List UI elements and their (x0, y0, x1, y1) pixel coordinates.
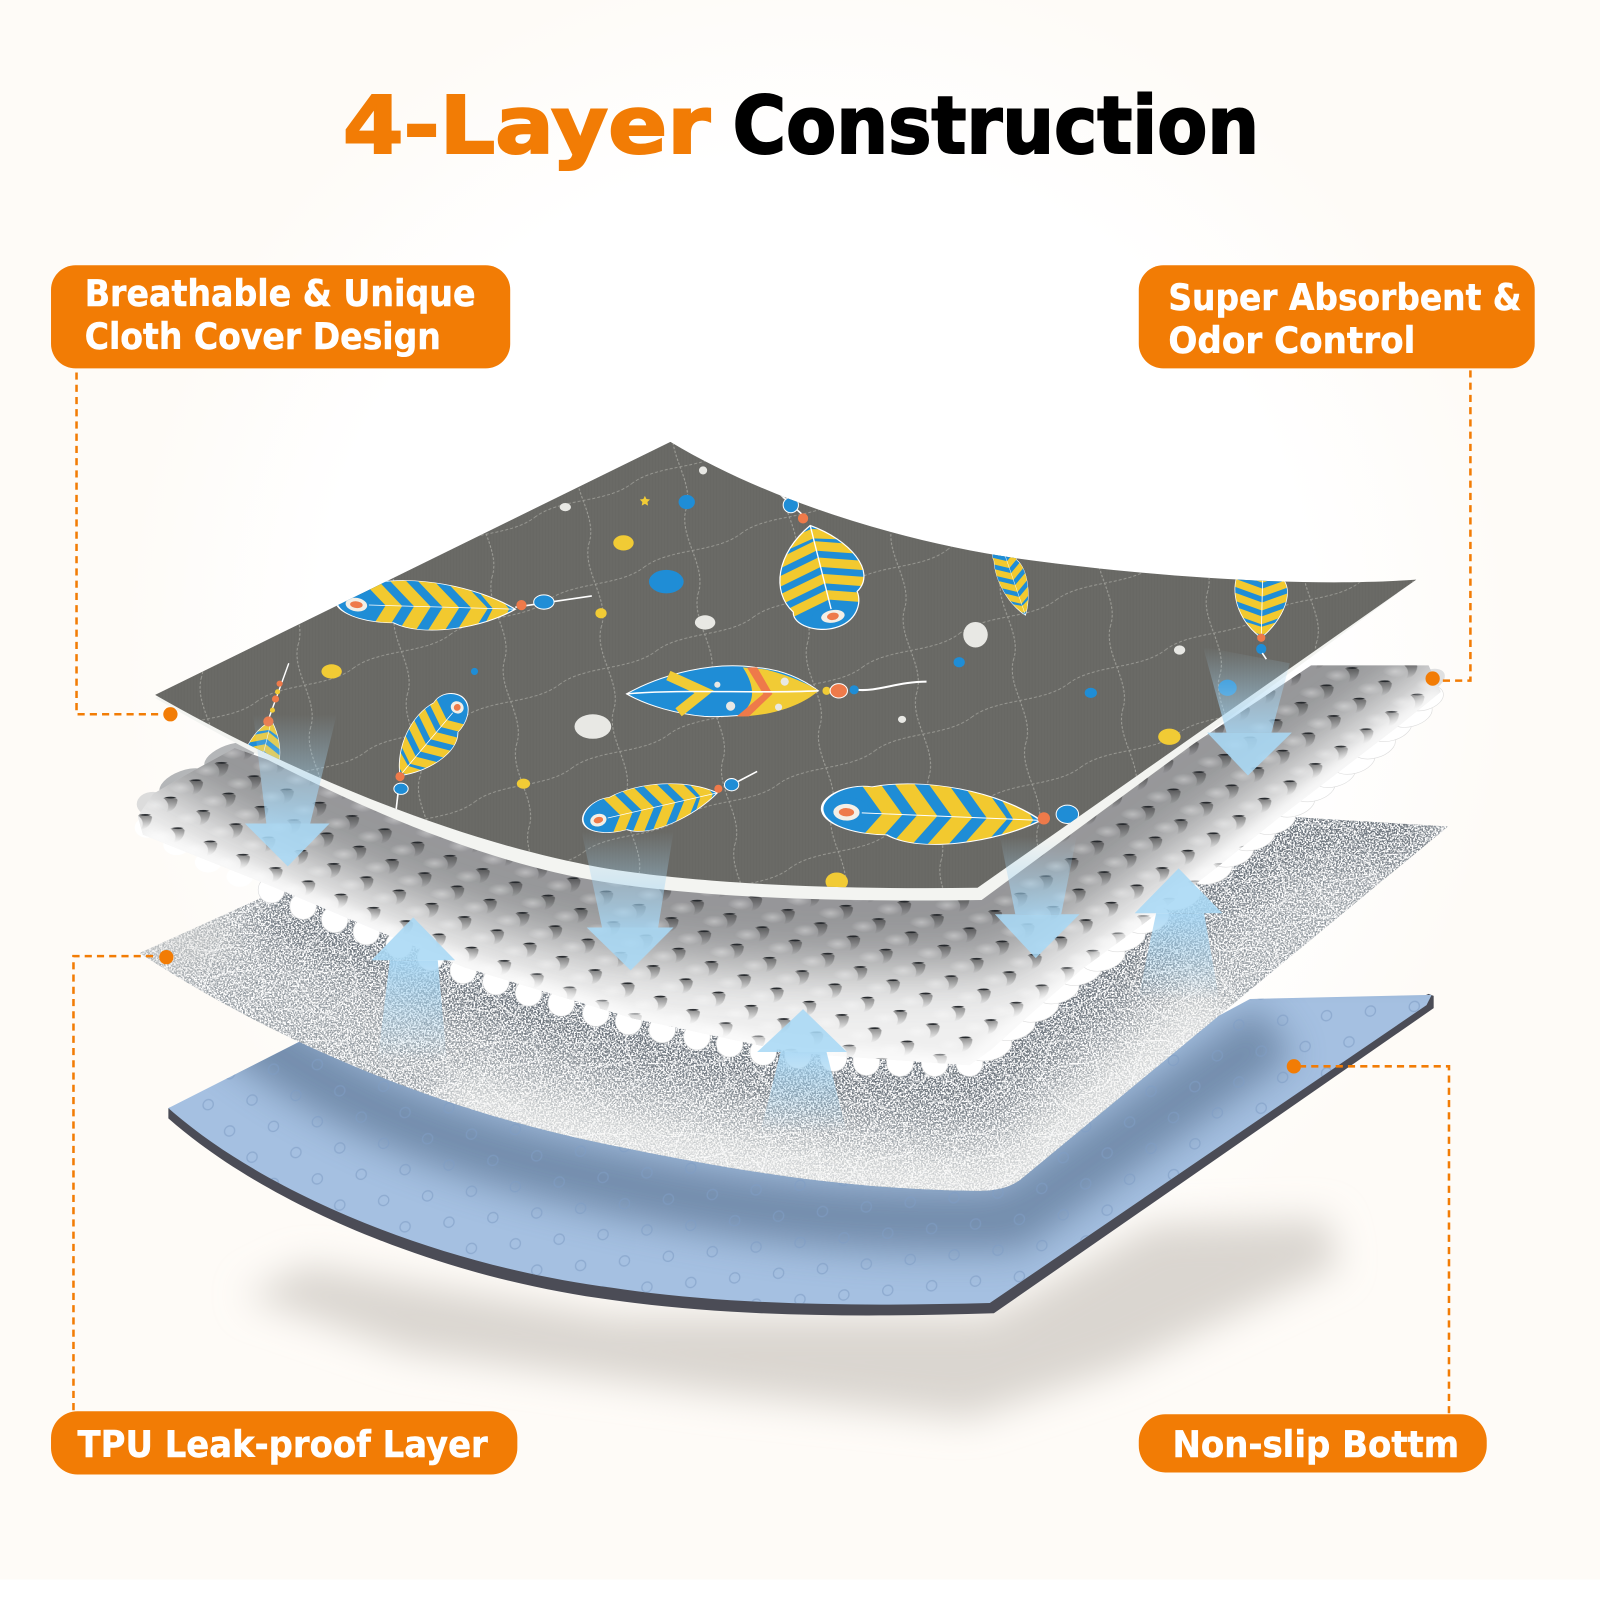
feather: upper left (336, 580, 592, 630)
cover white edge (155, 442, 1416, 900)
feather: lower left (393, 693, 469, 809)
cover dots (321, 466, 1237, 891)
feather: centre (627, 666, 927, 717)
flow arrow: up centre (757, 1009, 847, 1133)
layer 2: foam pegs along edges (135, 661, 1449, 1077)
layer 1: printed cloth cover (143, 434, 1429, 903)
callout: absorbent core (1139, 265, 1535, 686)
layer 2: textured foam sheet (138, 665, 1440, 1064)
callout: absorbent core: Super Absorbent & (1168, 276, 1521, 319)
callout: cloth cover (51, 265, 510, 721)
feather: far right cut (1234, 579, 1288, 660)
layer 3: absorbent fibre core (133, 806, 1459, 1204)
flow arrow: up left (371, 917, 455, 1061)
callout: cloth cover: Breathable & Unique (85, 272, 476, 315)
feather: top right cut (992, 554, 1029, 616)
flow arrow: up right (1135, 868, 1222, 1000)
flow arrow: down centre (582, 832, 673, 970)
floor shadow (245, 1219, 1339, 1418)
feather: top centre (779, 495, 865, 630)
flow arrow: down left (245, 714, 337, 866)
flow arrow: down right (995, 837, 1080, 958)
callout: non-slip bottom: Non-slip Bottm (1172, 1423, 1459, 1466)
title (343, 79, 1259, 172)
callout: absorbent core: Odor Control (1168, 319, 1415, 362)
feather: lower right (820, 783, 1080, 845)
callout: TPU layer (51, 950, 517, 1474)
layer 4: non-slip blue bottom (163, 980, 1439, 1316)
callout: non-slip bottom (1139, 1059, 1487, 1472)
feather: lower middle (582, 770, 758, 833)
callout: TPU layer: TPU Leak-proof Layer (78, 1423, 488, 1466)
feather: left with bead chain (248, 663, 290, 760)
callout: cloth cover: Cloth Cover Design (85, 315, 441, 358)
flow arrow: down far right (1203, 647, 1292, 776)
title: Construction (733, 79, 1259, 172)
title: 4-Layer (343, 79, 711, 172)
